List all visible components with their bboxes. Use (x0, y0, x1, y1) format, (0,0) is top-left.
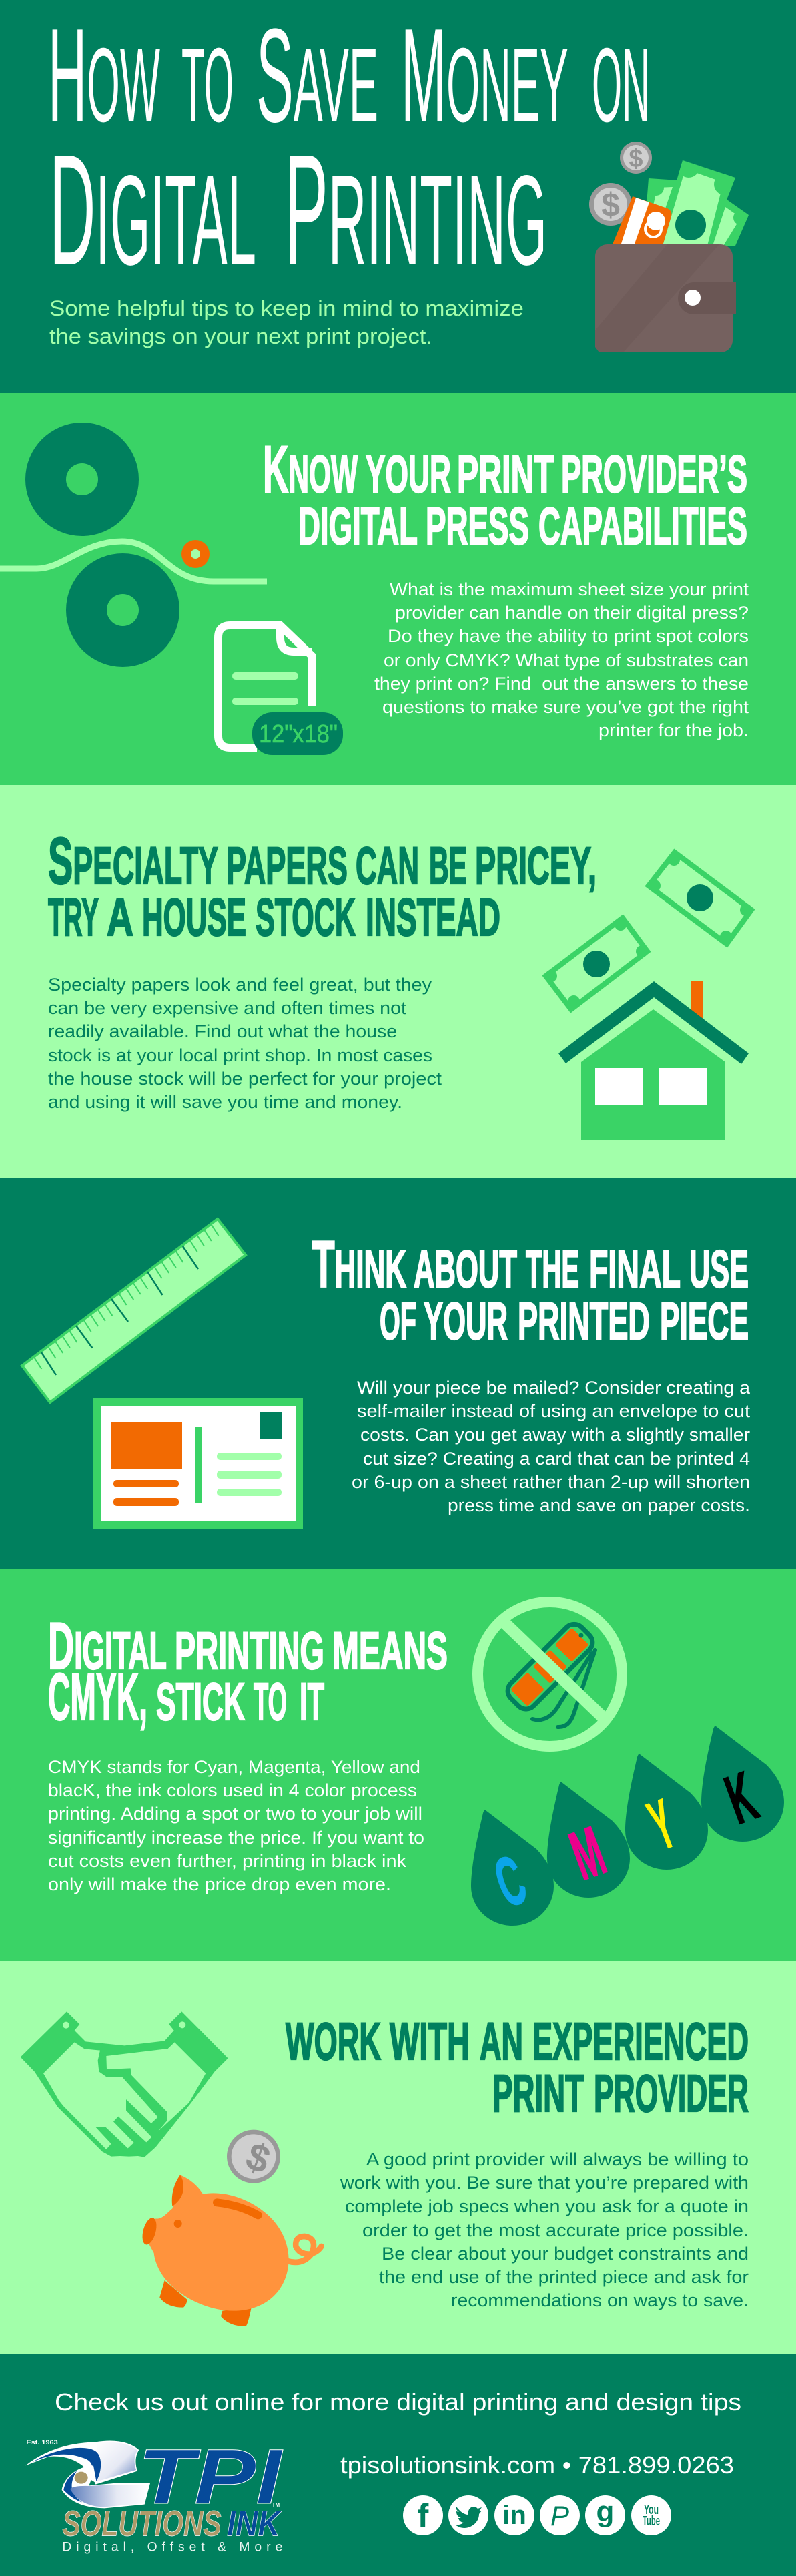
icon: facebook: f (418, 2497, 429, 2535)
icon: youtube: You (644, 2503, 659, 2517)
body text: provider can handle on their digital press? (395, 603, 749, 623)
body text: press time and save on paper costs. (448, 1495, 750, 1515)
title: MONEY (401, 1, 568, 150)
heading: WITH (390, 2011, 470, 2071)
icon: postcard (93, 1398, 303, 1529)
body text (352, 1378, 751, 1515)
body text: printing. Adding a spot or two to your job will (48, 1804, 422, 1824)
heading: THINK (312, 1227, 406, 1301)
heading: TRY (48, 887, 99, 947)
heading (286, 2011, 749, 2123)
subtitle: the savings on your next print project. (49, 324, 432, 348)
body text: questions to make sure you’ve got the right (382, 697, 749, 717)
icon: ink drop C: C (486, 1842, 535, 1922)
body text: blacK, the ink colors used in 4 color process (48, 1780, 417, 1800)
heading: OF (380, 1291, 416, 1350)
body text: can be very expensive and often times not (48, 998, 407, 1018)
body text: the end use of the printed piece and ask for (379, 2267, 749, 2287)
icon: ink drop M (547, 1782, 630, 1898)
heading: ABOUT (414, 1239, 517, 1298)
body text: complete job specs when you ask for a quote in (345, 2196, 749, 2216)
icon: wallet with cash and coins (589, 142, 749, 352)
heading: FINAL (589, 1239, 681, 1298)
icon: orange card (612, 196, 671, 246)
heading: INSTEAD (366, 887, 500, 947)
panel: digital printing means CMYK (0, 1569, 796, 1961)
icon: ink drop K (701, 1726, 784, 1842)
icon: google: g (596, 2495, 614, 2528)
icon: pinterest (540, 2495, 580, 2535)
icon: sheet of paper with size tag: 12"x18" (259, 720, 338, 748)
icon: large coin (589, 183, 632, 226)
body text: significantly increase the price. If you want to (48, 1828, 424, 1848)
panel: specialty papers (0, 785, 796, 1178)
icon: small coin: $ (629, 145, 643, 173)
subtitle (49, 296, 524, 348)
panel: footer (0, 2354, 796, 2576)
body text: work with you. Be sure that you’re prepared with (340, 2173, 749, 2193)
body text: recommendations on ways to save. (451, 2290, 749, 2310)
body text: Be clear about your budget constraints and (382, 2244, 749, 2264)
body text (374, 579, 749, 740)
icon: coin: $ (240, 2134, 276, 2182)
heading: STOCK (256, 887, 356, 947)
body text (340, 2149, 749, 2310)
icon: ink drop M: M (561, 1813, 615, 1895)
title: TO (181, 27, 234, 144)
heading: PRINT (457, 444, 554, 503)
heading: WORK (286, 2011, 381, 2071)
body text: What is the maximum sheet size your print (390, 579, 749, 599)
logo: TPI Solutions Ink: TM (272, 2502, 280, 2508)
body text: stock is at your local print shop. In most cases (48, 1045, 432, 1065)
icon: ink drop Y: Y (639, 1785, 684, 1864)
heading: HOUSE (142, 887, 246, 947)
logo: TPI Solutions Ink: Digital, Offset & More (62, 2541, 282, 2555)
title: SAVE (256, 1, 378, 150)
heading: CMYK, (48, 1659, 147, 1734)
heading: CAN (356, 836, 419, 895)
heading: BE (429, 836, 467, 895)
heading: DIGITAL (48, 1609, 167, 1683)
heading: YOUR (424, 1291, 508, 1350)
icon: house (558, 981, 749, 1140)
logo: TPI Solutions Ink (25, 2432, 284, 2555)
body text: self-mailer instead of using an envelope to cut (357, 1401, 751, 1421)
icon: front banknote (663, 160, 735, 244)
body text: readily available. Find out what the house (48, 1021, 397, 1041)
body text: cut size? Creating a card that can be printed 4 (363, 1449, 750, 1469)
heading: USE (689, 1239, 749, 1298)
body text: or only CMYK? What type of substrates can (384, 650, 749, 670)
call to action text: Check us out online for more digital printing and design tips (55, 2388, 741, 2416)
body text: Do they have the ability to print spot colors (388, 626, 749, 646)
body text: and using it will save you time and money. (48, 1092, 402, 1112)
icon: falling banknote upper (649, 852, 752, 944)
body text: printer for the job. (599, 720, 749, 740)
title (48, 1, 650, 298)
icon: linkedin (494, 2495, 534, 2535)
body text: cut costs even further, printing in black ink (48, 1851, 407, 1871)
title: DIGITAL (49, 121, 256, 298)
icon: printing press rollers (0, 423, 267, 667)
subtitle: Some helpful tips to keep in mind to maximize (49, 296, 524, 320)
icon: large coin: $ (601, 186, 620, 224)
icon: ink drop C (471, 1810, 554, 1926)
icon: pinterest: P (550, 2500, 569, 2531)
logo: TPI Solutions Ink: SOLUTIONS (62, 2504, 222, 2543)
heading: PRICEY, (475, 836, 596, 895)
title: HOW (48, 1, 160, 150)
body text: the house stock will be perfect for your project (48, 1069, 442, 1089)
icon: google (585, 2495, 625, 2535)
heading: TO (254, 1671, 287, 1731)
icon: handshake (21, 2011, 228, 2157)
icon: piggy bank (140, 2175, 322, 2326)
heading: AN (480, 2011, 523, 2071)
body text (48, 975, 442, 1112)
heading: YOUR (366, 444, 451, 503)
body text: or 6-up on a sheet rather than 2-up will shorten (352, 1472, 750, 1492)
logo: TPI Solutions Ink: TPI (138, 2432, 284, 2520)
heading: A (107, 887, 133, 947)
body text: CMYK stands for Cyan, Magenta, Yellow and (48, 1757, 420, 1777)
heading: KNOW (263, 432, 358, 506)
body text: they print on? Find out the answers to these (374, 674, 749, 694)
icon: facebook (403, 2495, 443, 2535)
logo: TPI Solutions Ink: Est. 1963 (26, 2439, 58, 2446)
body text: A good print provider will always be willing to (366, 2149, 749, 2169)
logo: TPI Solutions Ink: INK (227, 2504, 282, 2543)
heading: SPECIALTY (48, 824, 218, 898)
heading: STICK (156, 1671, 245, 1731)
icon: sheet of paper with size tag (218, 625, 343, 755)
icon: youtube: Tube (643, 2514, 660, 2529)
panel: think about the final use (0, 1178, 796, 1569)
icon: falling banknote lower (545, 918, 648, 1009)
heading: PRINT (492, 2063, 584, 2123)
heading: DIGITAL (298, 496, 418, 555)
icon: wallet body (595, 244, 736, 352)
icon: youtube (631, 2495, 671, 2535)
body text: Will your piece be mailed? Consider creating a (357, 1378, 751, 1398)
panel: header (49, 28, 749, 352)
panel: header: ON (592, 27, 650, 144)
heading (48, 1609, 448, 1734)
icon: linkedin: in (502, 2501, 526, 2530)
body text: order to get the most accurate price possible. (362, 2220, 749, 2240)
icon: ruler (22, 1219, 246, 1402)
icon: small coin (620, 142, 652, 174)
heading: PAPERS (226, 836, 348, 895)
heading (48, 824, 596, 947)
body text: Specialty papers look and feel great, but they (48, 975, 432, 995)
heading (312, 1227, 749, 1350)
body text: costs. Can you get away with a slightly smaller (360, 1425, 750, 1445)
heading: MEANS (332, 1621, 448, 1680)
panel: know your print provider (0, 393, 796, 785)
heading: IT (300, 1671, 324, 1731)
body text: only will make the price drop even more. (48, 1874, 391, 1894)
heading (263, 432, 747, 555)
heading: PRESS (426, 496, 529, 555)
icon: rear banknotes (646, 178, 749, 246)
heading: THE (526, 1239, 579, 1298)
icon: ink drop K: K (717, 1758, 766, 1839)
icon: twitter (448, 2495, 488, 2535)
icon: ink drop Y (625, 1754, 708, 1870)
contact details: tpisolutionsink.com • 781.899.0263 (340, 2451, 734, 2479)
heading: PRINTED (518, 1291, 650, 1350)
icon: crossed-out color swatch fan (478, 1602, 622, 1746)
body text (48, 1757, 424, 1894)
heading: PRINTING (175, 1621, 324, 1680)
panel: experienced print provider (0, 1961, 796, 2354)
social media icons (403, 2495, 671, 2535)
icon: coin (227, 2130, 280, 2183)
